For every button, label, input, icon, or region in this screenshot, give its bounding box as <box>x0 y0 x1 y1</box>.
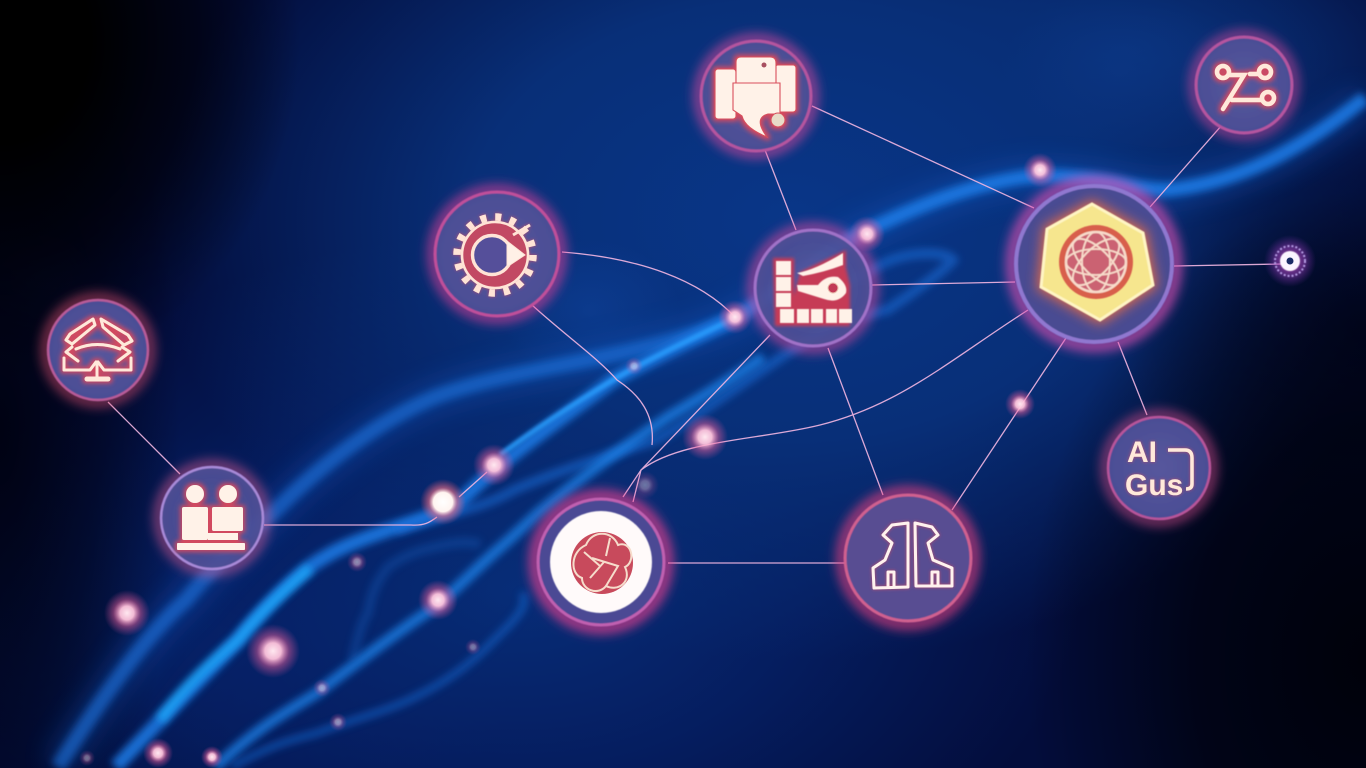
node: brain hands icon <box>46 298 150 402</box>
icon: AI Gus text <box>1125 436 1192 502</box>
node: AI Gus label <box>1106 415 1212 521</box>
icon: python <box>715 57 796 137</box>
icon: two people <box>177 485 245 550</box>
icon: connected nodes <box>1217 66 1274 109</box>
icon: AI Gus text: AI <box>1127 436 1157 469</box>
icon: hexagon <box>1041 204 1153 320</box>
icon: chart <box>773 250 852 326</box>
node: gear and eye icon <box>433 190 561 318</box>
node: white disc with flower icon <box>535 496 667 628</box>
icon: mirrored figure <box>873 523 952 588</box>
node: small radial endpoint <box>1264 235 1316 287</box>
glowing particles <box>79 153 1057 768</box>
connection lines <box>108 106 1282 563</box>
node: split figure icon <box>842 492 974 624</box>
node: top-right workflow icon <box>1194 35 1294 135</box>
node: central hub with hexagon and globe <box>1012 182 1176 346</box>
icon: AI Gus text: Gus <box>1125 469 1183 502</box>
node: data chart icon <box>753 228 873 348</box>
icon: gear <box>457 217 533 293</box>
icon: globe <box>1059 225 1133 299</box>
node: python icon <box>699 39 813 153</box>
node: people icon <box>159 465 265 571</box>
icon: flower <box>571 532 633 594</box>
icon: brain on stand <box>64 319 132 379</box>
